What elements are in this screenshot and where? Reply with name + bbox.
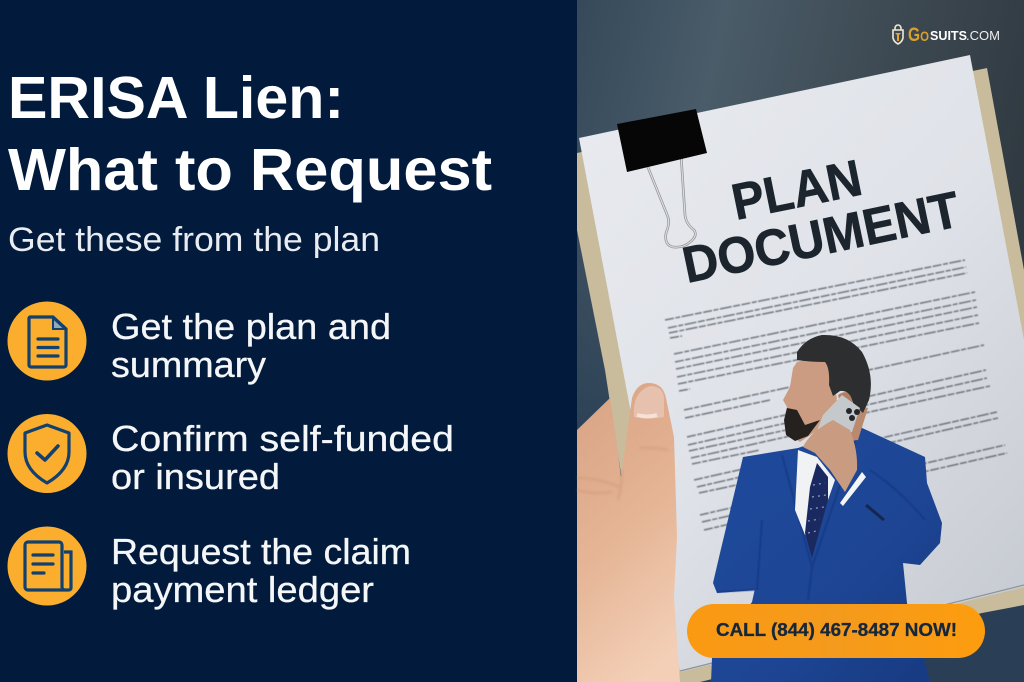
document heading: DOCUMENT: [678, 181, 964, 294]
hand holding document: [577, 383, 680, 682]
item text: payment ledger: [111, 569, 374, 610]
logo: GO: [908, 25, 929, 46]
document body lines: [665, 260, 1007, 530]
shirt cuff: [840, 472, 866, 506]
suit jacket: [711, 427, 942, 682]
logo: SUITS: [930, 28, 967, 43]
panel: photo of plan document: [577, 0, 1024, 682]
subtitle: Get these from the plan: [8, 221, 380, 259]
suit folds and lapels: [717, 427, 925, 600]
paper bottom edge: [680, 585, 1024, 671]
finger creases: [577, 448, 668, 500]
item text: Request the claim: [111, 531, 411, 572]
item text: Get the plan and: [111, 306, 391, 347]
icon: ledger pages: [8, 526, 86, 606]
cuff buttons: [866, 505, 884, 520]
logo: .COM: [966, 28, 1000, 43]
paper sheet: [579, 55, 1024, 672]
icon: document: [8, 302, 86, 380]
hand and wrist: [803, 420, 857, 492]
face: [783, 359, 837, 442]
thumbnail: [634, 386, 664, 418]
item text: summary: [111, 344, 266, 385]
title: [8, 65, 492, 203]
item text: [111, 531, 411, 610]
list item: plan and summary: [8, 302, 391, 385]
panel: left navy background: [0, 0, 577, 682]
title: ERISA Lien:: [8, 65, 344, 131]
beard: [784, 408, 820, 441]
item text: [111, 418, 454, 497]
call to action button: [687, 604, 985, 658]
neck: [820, 400, 868, 445]
binder clip: [617, 109, 707, 247]
icon: shield check: [8, 414, 86, 493]
list item: self-funded or insured: [8, 414, 454, 497]
title: What to Request: [8, 137, 492, 203]
document heading: PLAN: [727, 149, 867, 231]
shirt: [795, 450, 835, 535]
hair: [797, 335, 871, 413]
item text: [111, 306, 391, 385]
man on phone: [711, 335, 942, 682]
item text: or insured: [111, 456, 280, 497]
tie: [805, 463, 828, 558]
tie pattern: [808, 483, 826, 533]
call to action button: CALL (844) 467-8487 NOW!: [716, 620, 957, 640]
list item: claim payment ledger: [8, 526, 411, 610]
ear: [838, 392, 853, 410]
manila folder: [577, 68, 1024, 682]
item text: Confirm self-funded: [111, 418, 454, 459]
desk background: [577, 0, 1024, 682]
phone camera: [846, 408, 860, 421]
phone: [813, 395, 860, 442]
logo: [893, 25, 1000, 46]
